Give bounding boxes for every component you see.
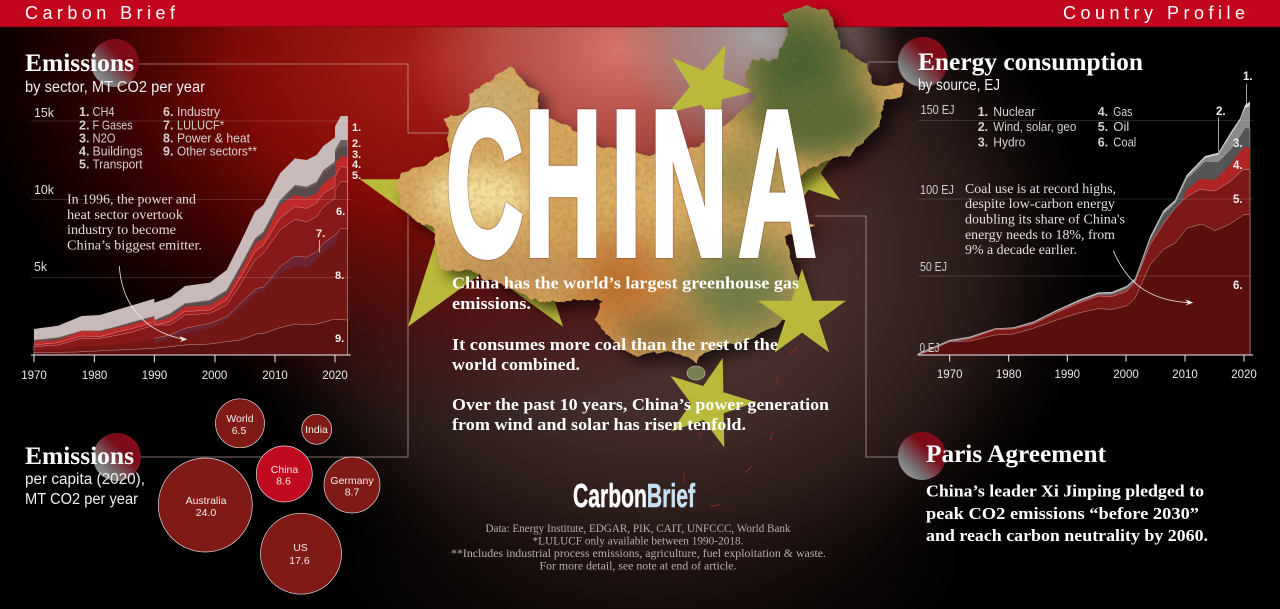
- panel: emissions per capita: [25, 399, 380, 594]
- series leader lines: [1219, 83, 1247, 152]
- legend: CH4: [92, 105, 115, 119]
- star: east: [747, 116, 856, 222]
- data sources footnote: *LULUCF only available between 1990-2018.: [532, 536, 744, 548]
- series numbers: 3.: [352, 149, 361, 161]
- bubble: World: World: [226, 413, 254, 425]
- legend: Gas: [1113, 105, 1132, 119]
- annotation: China’s biggest emitter.: [67, 238, 202, 252]
- annotation: Coal use is at record highs,: [965, 181, 1116, 196]
- body text: and reach carbon neutrality by 2060.: [926, 526, 1208, 545]
- header left label: Carbon Brief: [25, 3, 176, 23]
- star: south-east: [758, 269, 846, 352]
- title: CHINA: CHINA: [446, 68, 816, 298]
- legend: Wind, solar, geo: [993, 120, 1076, 134]
- x axis labels: 1970: [21, 370, 47, 382]
- flag stars in front of map: [655, 269, 846, 452]
- bubble: US: 17.6: [289, 555, 310, 567]
- legend: Nuclear: [993, 105, 1035, 119]
- body text: peak CO2 emissions “before 2030”: [926, 504, 1199, 523]
- marker for LULUCF: [318, 240, 320, 253]
- nine-dash line: [684, 347, 797, 506]
- legend: 5.: [79, 157, 89, 171]
- bubble: Germany: Germany: [330, 475, 374, 487]
- legend: Industry: [177, 105, 221, 119]
- gridlines: [31, 121, 351, 277]
- callout arrow: [119, 266, 184, 339]
- series numbers: 7.: [316, 228, 325, 240]
- legend: N2O: [92, 131, 116, 145]
- annotation: 9% a decade earlier.: [965, 242, 1077, 257]
- bubble: Australia: [158, 458, 252, 552]
- legend: 1.: [79, 105, 89, 119]
- series numbers: 1.: [1243, 71, 1253, 83]
- bubble: India: India: [305, 424, 328, 436]
- legend: 5.: [1098, 120, 1108, 134]
- annotation: doubling its share of China's: [965, 212, 1125, 226]
- star: south: [655, 345, 765, 452]
- data sources footnote: **Includes industrial process emissions, agriculture, fuel exploitation & waste.: [451, 548, 826, 560]
- bubble: World: [216, 399, 264, 448]
- bubble: India: [302, 414, 332, 444]
- series numbers: 5.: [1233, 194, 1243, 206]
- legend: 6.: [1098, 136, 1108, 150]
- series numbers: 9.: [335, 333, 344, 345]
- legend: 2.: [79, 118, 89, 132]
- flag stars: [360, 28, 856, 327]
- y axis labels: 150 EJ: [920, 102, 954, 117]
- legend: Hydro: [993, 136, 1025, 150]
- bubble: Australia: 24.0: [196, 507, 216, 519]
- axis: [31, 355, 351, 362]
- x axis labels: [937, 369, 1257, 381]
- heading: Emissions: [25, 50, 134, 77]
- series numbers: 1.: [352, 122, 361, 134]
- panel: energy consumption: [898, 37, 1257, 381]
- series numbers: 4.: [1233, 160, 1243, 172]
- x axis labels: 2010: [1172, 369, 1198, 381]
- legend: F Gases: [92, 118, 132, 132]
- x axis labels: 1980: [82, 370, 107, 382]
- section globe: [91, 39, 139, 87]
- heading: Emissions: [25, 443, 134, 470]
- bubble: China: 8.6: [276, 476, 291, 488]
- bubble: World: 6.5: [232, 425, 246, 437]
- legend: 9.: [163, 144, 173, 158]
- series numbers: 8.: [335, 270, 344, 282]
- annotation: [965, 181, 1125, 257]
- intro text: [452, 274, 830, 434]
- Hainan island: [687, 366, 705, 380]
- legend: 4.: [79, 144, 89, 158]
- bubble: Australia: Australia: [186, 495, 227, 507]
- x axis labels: 2020: [322, 370, 348, 382]
- legend: 7.: [163, 118, 173, 132]
- series numbers: 3.: [1233, 138, 1243, 150]
- heading: Paris Agreement: [926, 441, 1107, 468]
- body text: [926, 482, 1208, 545]
- y axis labels: 0 EJ: [920, 340, 940, 355]
- subheading: per capita (2020),: [25, 471, 145, 488]
- section globe: [93, 433, 141, 481]
- y axis labels: 50 EJ: [920, 259, 947, 274]
- subheading: by source, EJ: [918, 77, 1000, 94]
- intro text: world combined.: [452, 355, 580, 374]
- legend: 1.: [978, 105, 988, 119]
- data sources footnote: [451, 523, 826, 572]
- legend: 8.: [163, 131, 173, 145]
- legend: [79, 105, 257, 171]
- y axis labels: 15k: [34, 105, 54, 120]
- legend: 3.: [978, 136, 988, 150]
- x axis labels: 2000: [202, 370, 227, 382]
- data sources footnote: Data: Energy Institute, EDGAR, PIK, CAIT, UNFCCC, World Bank: [486, 523, 791, 535]
- x axis labels: 1980: [996, 369, 1021, 381]
- y axis labels: 10k: [34, 182, 54, 197]
- y axis labels: [920, 102, 954, 355]
- stacked area chart: [917, 83, 1253, 362]
- legend: 4.: [1098, 105, 1108, 119]
- x axis labels: [21, 370, 348, 382]
- annotation: [67, 192, 202, 252]
- series numbers: 2.: [1216, 106, 1226, 118]
- section globe: [898, 37, 948, 87]
- x axis labels: 1990: [142, 370, 167, 382]
- series numbers: 4.: [352, 159, 361, 171]
- annotation: heat sector overtook: [67, 207, 183, 222]
- legend: 6.: [163, 105, 173, 119]
- legend: [978, 105, 1136, 150]
- legend: Buildings: [92, 144, 142, 158]
- y axis labels: [34, 105, 54, 274]
- legend: Power & heat: [177, 131, 251, 145]
- panel: emissions by sector: [21, 39, 361, 382]
- intro text: It consumes more coal than the rest of the: [452, 335, 778, 354]
- series numbers: [1216, 71, 1253, 292]
- legend: Transport: [92, 157, 143, 171]
- legend: Other sectors**: [177, 144, 257, 158]
- annotation: In 1996, the power and: [67, 192, 196, 206]
- axis: [917, 355, 1253, 362]
- series numbers: 5.: [352, 170, 361, 182]
- legend: Coal: [1113, 136, 1136, 150]
- annotation: despite low-carbon energy: [965, 196, 1115, 211]
- star: north: [652, 28, 767, 140]
- series numbers: 6.: [1233, 280, 1243, 292]
- y axis labels: 5k: [34, 259, 47, 274]
- intro text: emissions.: [452, 294, 531, 313]
- y axis labels: 100 EJ: [920, 182, 954, 197]
- panel: Paris Agreement: [898, 432, 1208, 545]
- series numbers: [316, 122, 361, 345]
- legend: 2.: [978, 120, 988, 134]
- bubble: US: US: [293, 542, 308, 554]
- x axis labels: 2010: [262, 370, 288, 382]
- connector lines: [135, 62, 900, 457]
- bubble: US: [260, 513, 342, 594]
- header right label: Country Profile: [1063, 3, 1245, 23]
- legend: LULUCF*: [177, 118, 224, 132]
- star: large: [360, 88, 611, 327]
- x axis labels: 1970: [937, 369, 962, 381]
- body text: China’s leader Xi Jinping pledged to: [926, 482, 1204, 500]
- annotation: industry to become: [67, 222, 176, 237]
- data sources footnote: For more detail, see note at end of article.: [540, 560, 737, 572]
- bubble: China: [256, 446, 312, 502]
- subheading: MT CO2 per year: [25, 491, 138, 508]
- header bar: [0, 0, 1280, 27]
- callout arrow: [1113, 251, 1189, 303]
- x axis labels: 2020: [1231, 369, 1257, 381]
- series numbers: 2.: [352, 138, 361, 150]
- logo: Carbon Brief: CarbonBrief: [573, 477, 696, 514]
- x axis labels: 2000: [1113, 369, 1139, 381]
- stacked area chart: [31, 116, 351, 362]
- series numbers: 6.: [336, 206, 345, 218]
- intro text: China has the world’s largest greenhouse gas: [452, 274, 799, 292]
- annotation: energy needs to 18%, from: [965, 227, 1116, 242]
- map of China: [380, 0, 920, 380]
- section globe: [898, 432, 946, 480]
- intro text: Over the past 10 years, China’s power generation: [452, 395, 830, 414]
- legend: Oil: [1113, 120, 1129, 134]
- legend: 3.: [79, 131, 89, 145]
- x axis labels: 1990: [1055, 369, 1080, 381]
- gridlines: [918, 121, 1253, 276]
- bubble: China: China: [271, 464, 298, 476]
- bubble: Germany: 8.7: [345, 486, 359, 498]
- intro text: from wind and solar has risen tenfold.: [452, 415, 746, 434]
- heading: Energy consumption: [918, 49, 1143, 76]
- bubble: Germany: [324, 457, 380, 513]
- subheading: by sector, MT CO2 per year: [25, 79, 205, 96]
